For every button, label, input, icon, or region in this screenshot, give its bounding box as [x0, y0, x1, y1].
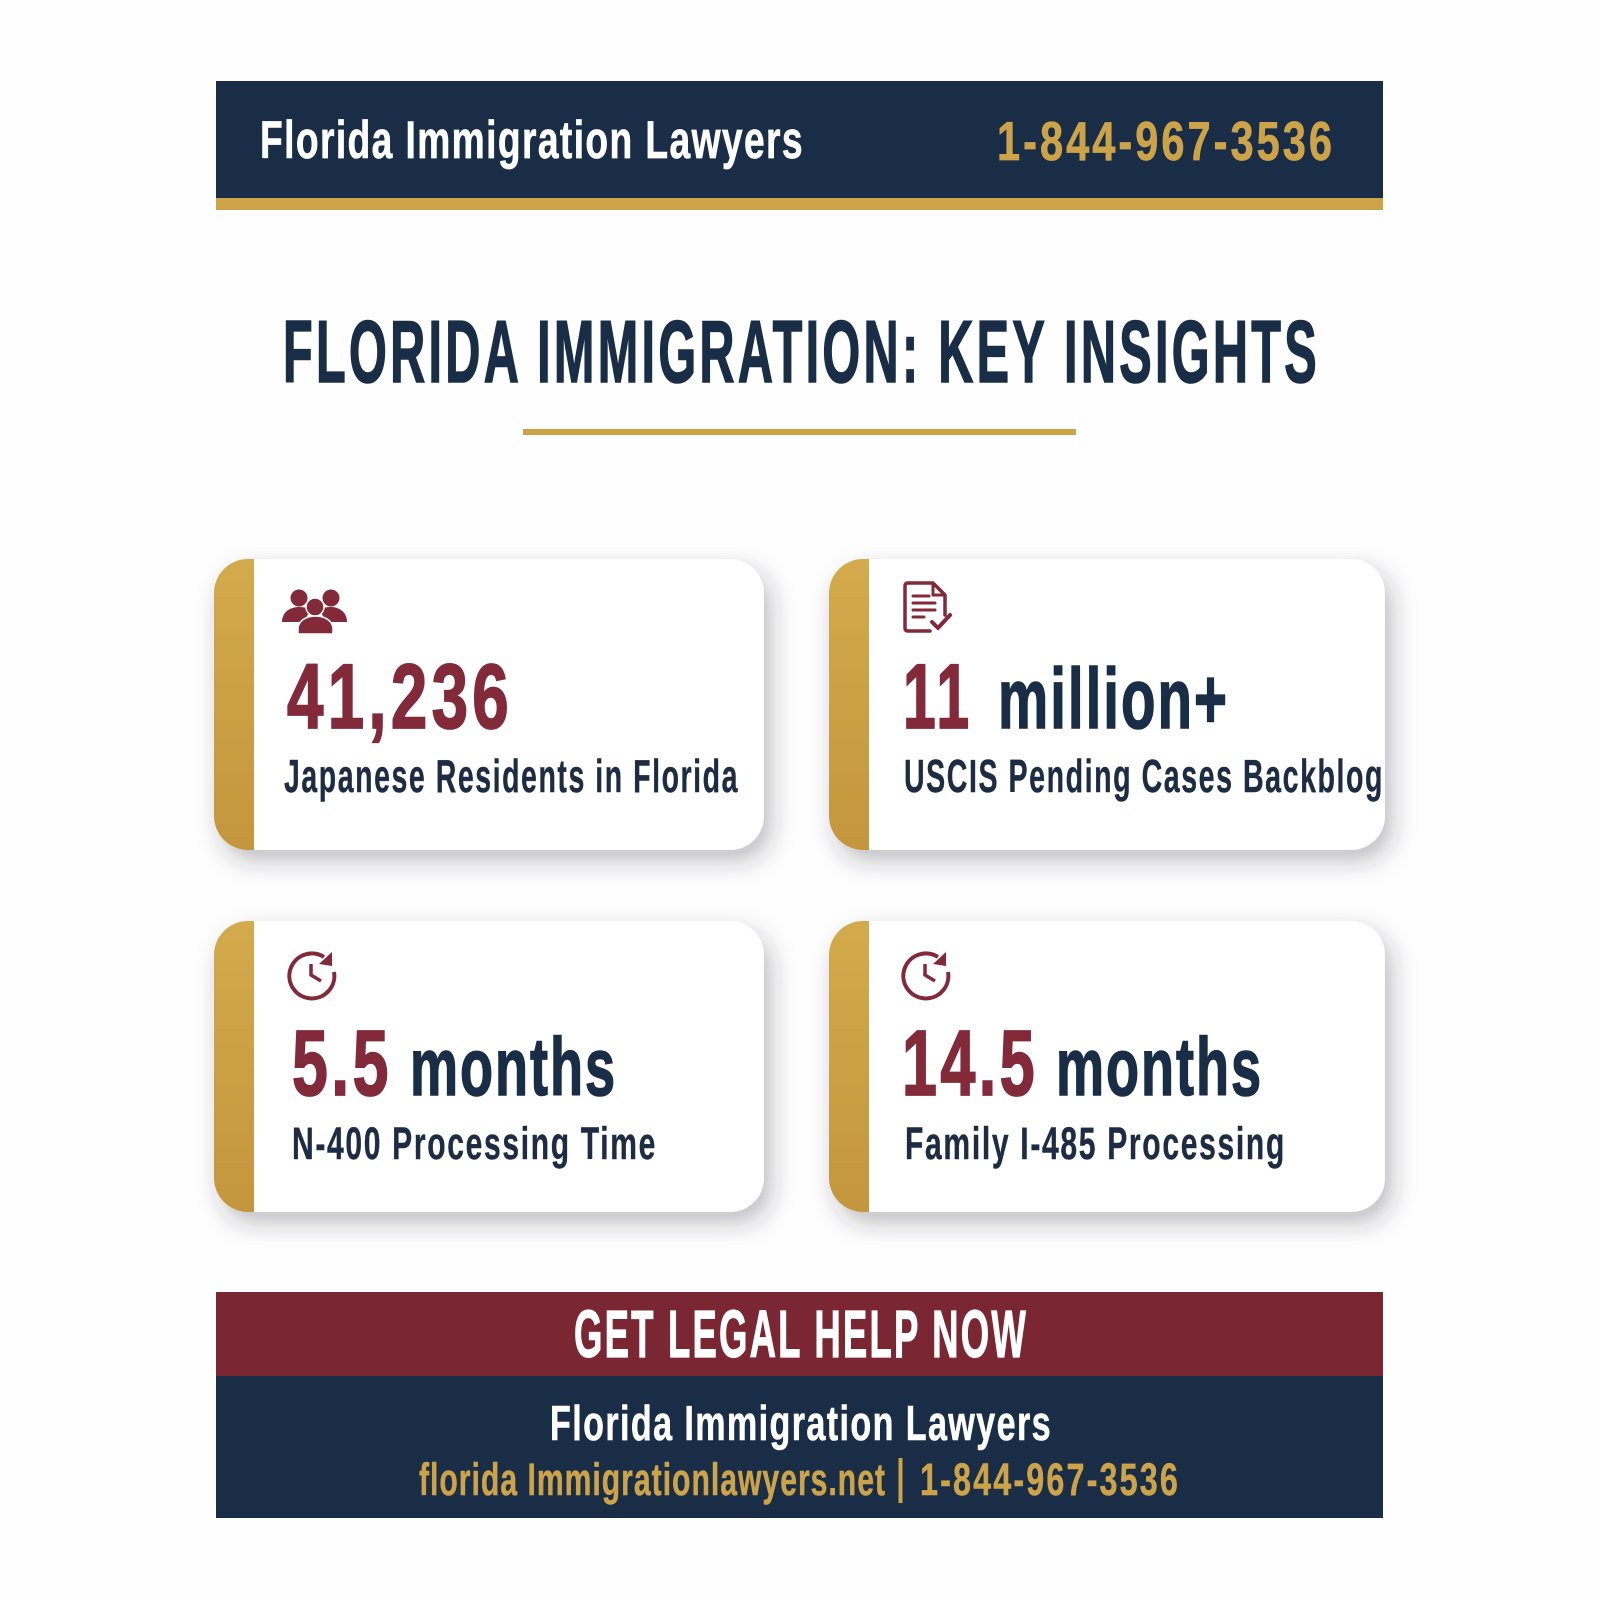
stat value: 11 [903, 646, 973, 748]
icon: clock with arrow [903, 952, 948, 998]
footer firm name: Florida Immigration Lawyers [550, 1397, 1052, 1451]
stat label: N-400 Processing Time [292, 1118, 657, 1169]
call to action banner [216, 1292, 1383, 1376]
panel: Japanese residents [214, 559, 764, 850]
icon: clock with arrow [289, 952, 334, 998]
stat value: 14.5 [902, 1011, 1038, 1115]
stat label: Family I-485 Processing [905, 1118, 1286, 1169]
call to action heading: GET LEGAL HELP NOW [574, 1297, 1028, 1372]
stat unit: million+ [998, 652, 1229, 747]
panel: N-400 processing [214, 921, 764, 1212]
header firm name: Florida Immigration Lawyers [260, 111, 804, 170]
footer website: florida Immigrationlawyers.net [419, 1454, 886, 1505]
stat label: Japanese Residents in Florida [284, 750, 739, 802]
panel: USCIS backlog [829, 559, 1385, 850]
stat unit: months [1056, 1022, 1263, 1113]
stat unit: months [410, 1022, 617, 1113]
title underline [523, 429, 1076, 435]
icon: people group [282, 590, 347, 634]
footer phone number: 1-844-967-3536 [920, 1454, 1180, 1505]
stat value: 41,236 [287, 646, 513, 748]
header phone number: 1-844-967-3536 [997, 110, 1335, 172]
panel: Family I-485 processing [829, 921, 1385, 1212]
icon: document with check [905, 583, 950, 631]
contact footer [216, 1376, 1383, 1518]
header banner [216, 81, 1383, 210]
stat value: 5.5 [292, 1011, 392, 1115]
footer separator [898, 1458, 902, 1503]
